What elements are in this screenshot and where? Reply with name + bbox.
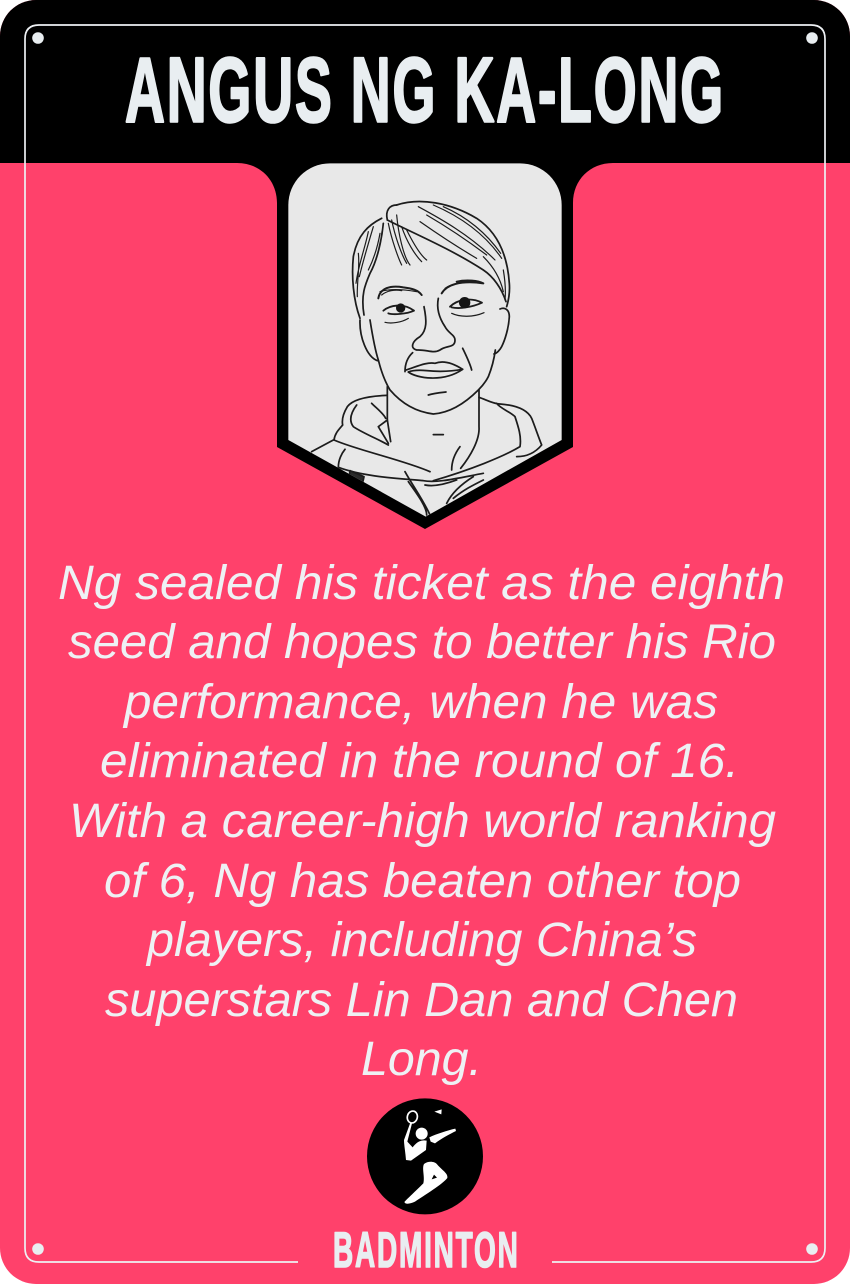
- eyes: [383, 306, 414, 314]
- footer label: BADMINTON: [333, 1221, 518, 1278]
- body text: performance, when he was: [122, 676, 718, 729]
- body text: eliminated in the round of 16.: [100, 735, 739, 788]
- icon: badminton pictogram: [367, 1098, 483, 1214]
- body text: [58, 557, 785, 1086]
- body text: Ng sealed his ticket as the eighth: [58, 557, 785, 610]
- eyebrows: [378, 287, 422, 298]
- neck: [387, 387, 479, 470]
- body text: superstars Lin Dan and Chen: [105, 974, 738, 1027]
- hood: [334, 395, 430, 472]
- hair outline: [397, 202, 510, 307]
- smile lines and mouth: [405, 348, 472, 372]
- header band: [0, 0, 850, 529]
- portrait: [288, 163, 562, 517]
- body text: With a career-high world ranking: [69, 795, 776, 848]
- body text: seed and hopes to better his Rio: [68, 616, 776, 669]
- chin: [428, 392, 446, 395]
- body text: players, including China’s: [145, 914, 697, 967]
- title: ANGUS NG KA-LONG: [125, 39, 723, 142]
- nose: [413, 298, 455, 352]
- ears: [360, 308, 509, 361]
- hair strands: [356, 205, 505, 300]
- body text: of 6, Ng has beaten other top: [104, 855, 741, 908]
- face outline: [370, 320, 495, 414]
- body text: Long.: [361, 1033, 482, 1086]
